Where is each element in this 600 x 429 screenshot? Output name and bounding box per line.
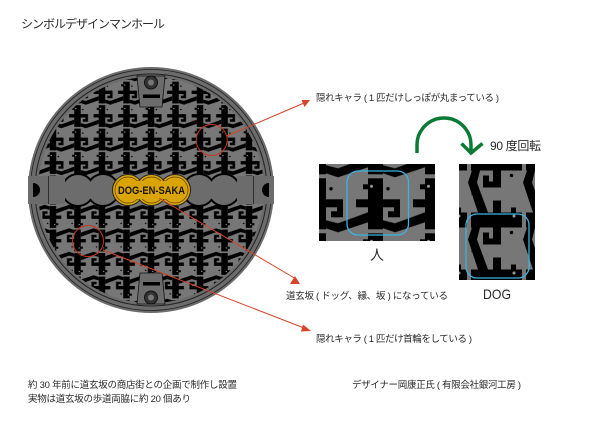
panel: person pattern — [319, 164, 435, 241]
blue highlight: dog — [466, 214, 529, 278]
arrow to badge label — [159, 198, 300, 284]
label: badge text: 道玄坂 ( ドッグ、縁、坂 ) になっている — [286, 290, 448, 302]
bottom plate with bolt — [137, 273, 165, 304]
outer rim — [28, 67, 274, 313]
title: シンボルデザインマンホール — [21, 16, 165, 31]
centre band left — [28, 173, 120, 207]
green rotation arrow — [417, 118, 482, 153]
callout circle: collar figure — [72, 226, 104, 256]
gold DOG-EN-SAKA badge — [112, 174, 190, 206]
centre band right — [182, 173, 274, 207]
note: history: 約 30 年前に道玄坂の商店街との企画で制作し設置 — [28, 379, 237, 391]
label: person: 人 — [370, 247, 384, 263]
callout circle: curled tail figure — [196, 124, 227, 156]
manhole cover — [28, 67, 274, 313]
pattern: top half of figures — [38, 77, 264, 190]
top plate with bolt — [137, 76, 165, 107]
blue highlight: person — [347, 171, 408, 235]
note: designer: デザイナー岡康正氏 ( 有限会社銀河工房 ) — [352, 379, 521, 391]
gold DOG-EN-SAKA badge: DOG-EN-SAKA — [118, 185, 185, 197]
label: dog: DOG — [483, 286, 511, 302]
label: 90 degree rotation: 90 度回転 — [490, 139, 541, 153]
pattern: bottom half of figures — [38, 190, 264, 303]
arrow to hidden character 2 — [103, 250, 311, 332]
note: history — [28, 379, 237, 405]
note: history: 実物は道玄坂の歩道両脇に約 20 個あり — [28, 393, 191, 405]
label: hidden character curled tail: 隠れキャラ ( 1 匹だけしっぽが丸まっている ) — [316, 92, 499, 104]
arrow to hidden character 1 — [227, 100, 310, 136]
label: hidden character collar: 隠れキャラ ( 1 匹だけ首輪をしている ) — [316, 333, 472, 345]
panel: dog pattern — [459, 164, 535, 280]
